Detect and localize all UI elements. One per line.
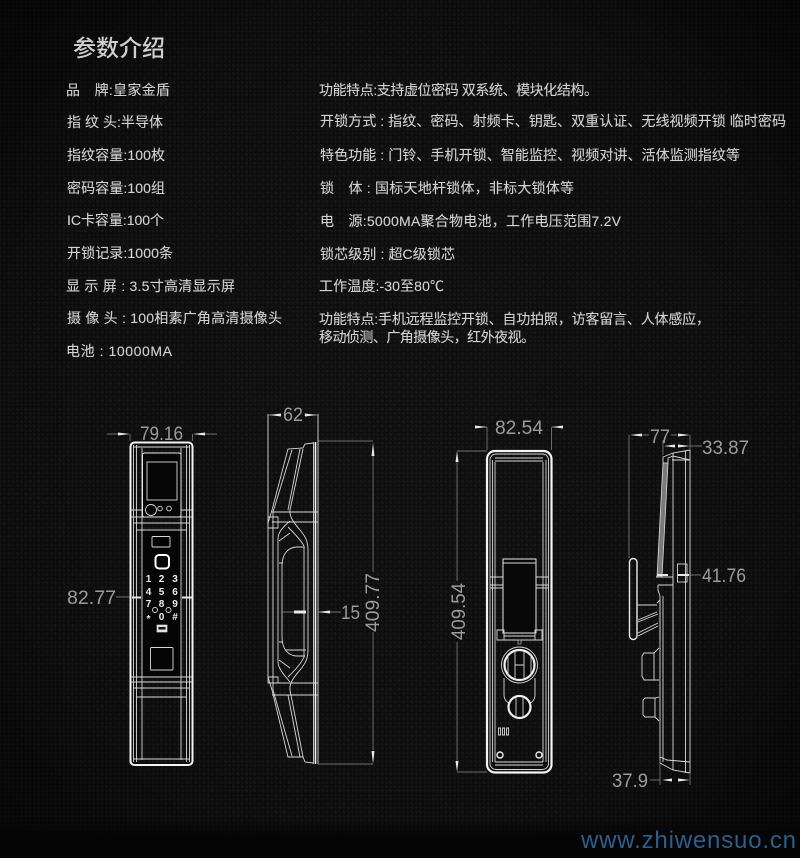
dimension: 15: 15 [341,603,360,624]
spec list: left column: 显 示 屏 : 3.5寸高清显示屏 [66,278,235,294]
keypad panel: 5 [159,587,165,598]
spec list: left column: 指 纹 头:半导体 [67,114,163,130]
spec list: right column: 锁 体 : 国标天地杆锁体，非标大锁体等 [320,180,574,196]
watermark: www.zhiwensuo.cn [580,827,796,854]
keypad panel: 6 [172,587,178,598]
title: 参数介绍 [73,35,165,61]
keypad panel: 9 [172,599,178,610]
knob lower [643,697,659,721]
spec list: left column: 密码容量:100组 [67,180,165,196]
keypad panel: * [147,614,151,625]
keypad panel: 0 [159,612,165,623]
spec list: right column: 特色功能 : 门铃、手机开锁、智能监控、视频对讲、活体监测指纹等 [320,147,740,163]
dimension: 82.77: 82.77 [67,588,116,609]
dimension: 79.16: 79.16 [140,424,183,445]
dimension: 77: 77 [650,427,670,448]
dimension: 409.54: 409.54 [449,583,470,640]
spec list: left column: 品 牌:皇家金盾 [66,82,170,98]
spec list: left column: 开锁记录:1000条 [67,245,173,261]
spec list: right column: 工作温度:-30至80℃ [319,278,444,294]
dimension: 37.9: 37.9 [612,771,648,792]
spec list: right column: 开锁方式 : 指纹、密码、射频卡、钥匙、双重认证、无线视频开锁 临时密码 [320,113,786,129]
spec list: right column [319,82,786,345]
spec list: left column: IC卡容量:100个 [67,212,164,228]
spec list: right column: 锁芯级别 : 超C级锁芯 [320,246,455,262]
diagram: back view with lock cylinders [449,418,563,772]
keypad panel: # [172,612,178,623]
spec list: left column: 指纹容量:100枚 [67,147,165,163]
keypad panel: 4 [146,587,152,598]
keypad panel: 8 [159,599,165,610]
camera panel [142,453,181,517]
spec list: left column: 电池 : 10000MA [66,343,173,359]
spec list: right column: 电 源:5000MA聚合物电池，工作电压范围7.2V [320,213,622,229]
keypad panel: 2 [159,574,165,585]
dimension: 33.87: 33.87 [702,438,749,459]
lower lock cylinder [508,696,530,718]
spec list: right column: 功能特点:手机远程监控开锁、自功拍照，访客留言、人体感应， [319,311,710,327]
diagram: profile view with handle and knobs [612,427,749,792]
keypad panel: 1 [146,574,152,585]
upper lock cylinder [502,647,538,683]
keypad panel: 3 [172,574,178,585]
spec list: left column: 摄 像 头 : 100相素广角高清摄像头 [67,310,282,326]
diagram: front view with keypad [67,424,217,765]
knob upper [642,648,659,680]
dimension: 82.54: 82.54 [495,418,543,439]
diagram: side view with handle [268,405,384,764]
spec list: right column: 移动侦测、广角摄像头，红外夜视。 [319,329,535,345]
spec list: left column [66,82,282,359]
spec list: right column: 功能特点:支持虚位密码 双系统、模块化结构。 [319,82,598,98]
handle [630,558,660,640]
dimension: 62: 62 [283,405,303,426]
dimension: 409.77: 409.77 [363,573,384,632]
keypad panel: 7 [146,599,152,610]
dimension: 41.76: 41.76 [702,566,746,587]
keypad panel [142,530,180,676]
